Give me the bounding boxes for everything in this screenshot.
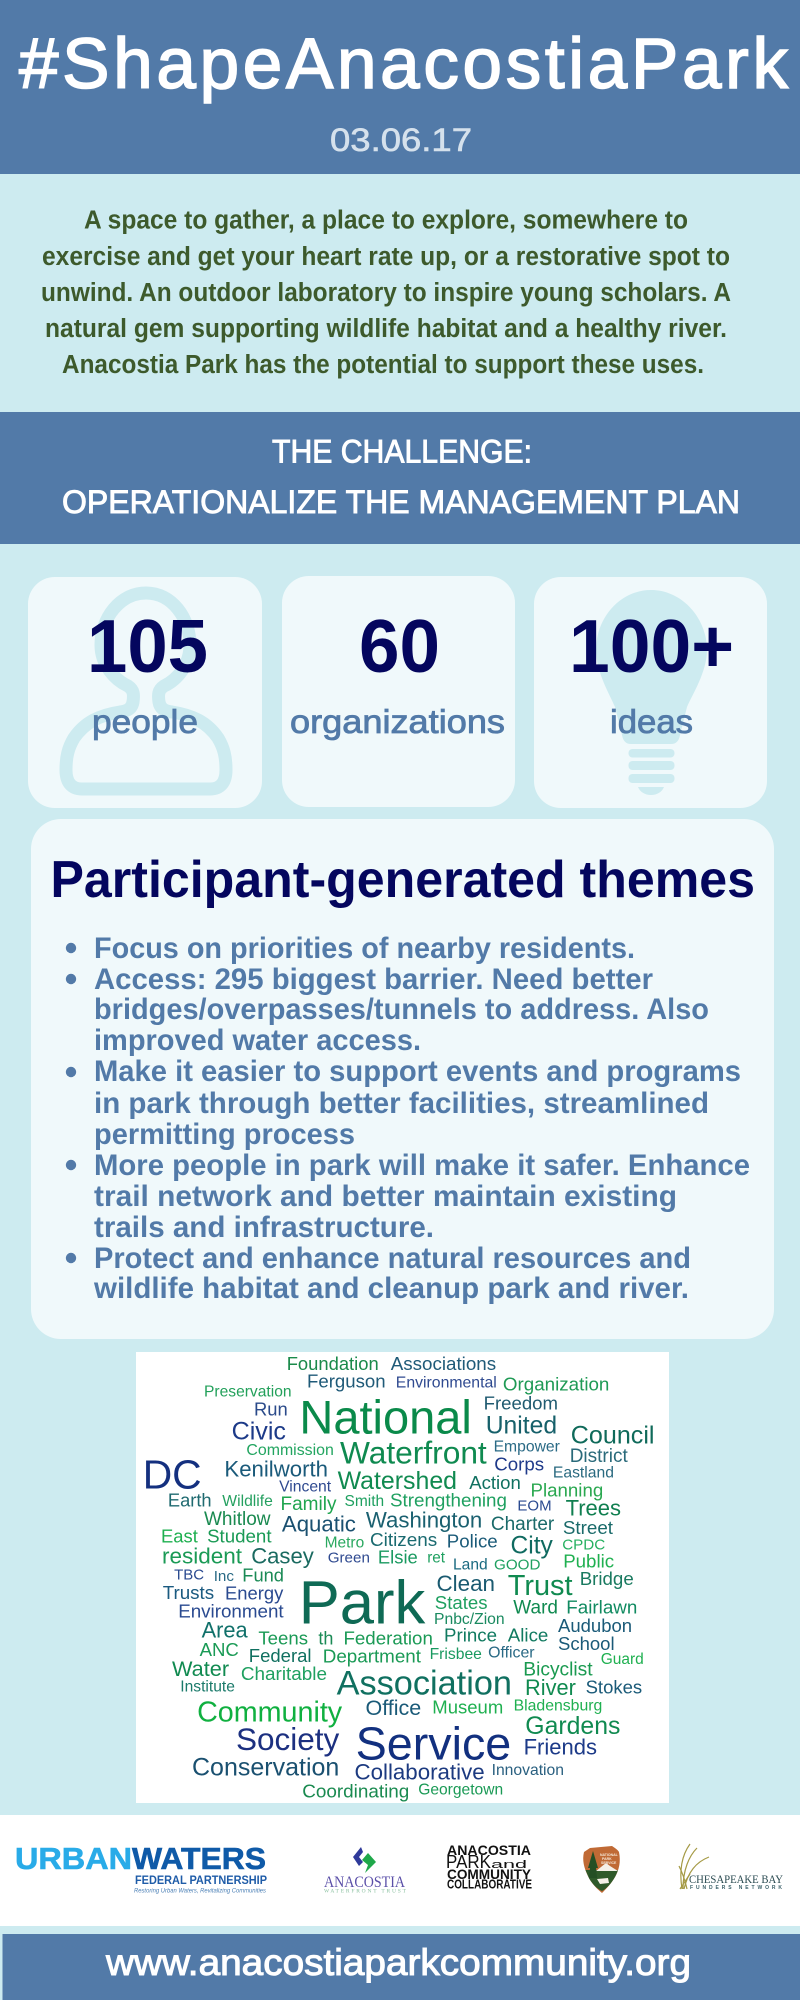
date: 03.06.17 <box>330 122 472 158</box>
header banner <box>0 0 800 174</box>
logo: National Park Service arrowhead <box>583 1846 620 1893</box>
stat card: people <box>28 577 262 808</box>
word cloud: Pnbc/Zion <box>434 1611 505 1628</box>
bullet list text: Focus on priorities of nearby residents. <box>94 932 635 965</box>
word cloud: City <box>510 1532 554 1559</box>
bullet list text: in park through better facilities, streamlined <box>94 1087 709 1120</box>
word cloud: Waterfront <box>340 1434 487 1470</box>
word cloud: Whitlow <box>204 1509 271 1530</box>
challenge banner <box>0 412 800 544</box>
intro text block: Anacostia Park has the potential to support these uses. <box>62 351 704 379</box>
stat number: 60: 60 <box>359 604 440 688</box>
word cloud: resident <box>162 1543 243 1568</box>
word cloud: Smith <box>344 1493 384 1510</box>
logo: Anacostia Park and Community Collaborative: COLLABORATIVE <box>447 1878 532 1892</box>
intro text block: unwind. An outdoor laboratory to inspire young scholars. A <box>41 279 731 307</box>
title: #ShapeAnacostiaPark <box>19 25 788 104</box>
word cloud: Vincent <box>279 1479 332 1496</box>
word cloud: Freedom <box>484 1392 558 1413</box>
word cloud: EOM <box>517 1498 552 1515</box>
word cloud: Run <box>254 1398 288 1419</box>
word cloud: Family <box>280 1494 337 1515</box>
bullet list text <box>93 932 750 1305</box>
bullet list text: bridges/overpasses/tunnels to address. Also <box>94 993 709 1026</box>
logo: National Park Service arrowhead: NATIONAL <box>600 1853 619 1857</box>
intro text block: exercise and get your heart rate up, or a restorative spot to <box>42 243 730 271</box>
intro text block: A space to gather, a place to explore, somewhere to <box>84 206 688 234</box>
stat number: 105: 105 <box>87 604 208 688</box>
word cloud: Society <box>236 1721 340 1757</box>
logo: Anacostia Park and Community Collaborative: PARK <box>446 1852 491 1872</box>
word cloud: Environment <box>178 1600 284 1621</box>
word cloud: Water <box>172 1656 229 1681</box>
word cloud: Commission <box>246 1442 334 1459</box>
word cloud: Organization <box>503 1374 609 1395</box>
word cloud: Wildlife <box>222 1493 273 1510</box>
logo: Anacostia Waterfront Trust: WATERFRONT TRUST <box>324 1888 407 1894</box>
word cloud: Strengthening <box>390 1490 507 1511</box>
word cloud: Alice <box>508 1625 548 1646</box>
word cloud: GOOD <box>494 1556 540 1573</box>
website url: www.anacostiaparkcommunity.org <box>105 1942 691 1983</box>
word cloud: Federation <box>344 1627 433 1648</box>
word cloud: National <box>299 1390 472 1443</box>
word cloud: Area <box>202 1617 249 1642</box>
logo: Anacostia Park and Community Collaborative: and <box>491 1859 527 1871</box>
word cloud: Eastland <box>553 1464 614 1481</box>
word cloud: Institute <box>180 1679 235 1696</box>
word cloud: Street <box>563 1517 614 1538</box>
word cloud: TBC <box>174 1566 204 1583</box>
word cloud: Earth <box>168 1490 212 1511</box>
stat card: ideas <box>534 577 767 808</box>
word cloud: East <box>161 1526 198 1547</box>
word cloud: Bladensburg <box>514 1698 602 1715</box>
panel: participant-generated themes <box>31 819 774 1339</box>
icon: light bulb <box>596 590 707 795</box>
word cloud: Action <box>469 1472 521 1493</box>
word cloud <box>136 1352 669 1803</box>
word cloud: th <box>318 1628 333 1648</box>
word cloud: Charitable <box>241 1664 327 1685</box>
logo: National Park Service arrowhead: SERVICE <box>601 1861 617 1865</box>
word cloud: Student <box>207 1526 272 1547</box>
word cloud: Ferguson <box>307 1370 386 1391</box>
word cloud: Ward <box>513 1597 558 1618</box>
word cloud: Planning <box>530 1480 603 1501</box>
stat card: organizations <box>282 576 515 807</box>
word cloud: Gardens <box>525 1713 620 1740</box>
word cloud: Office <box>366 1696 421 1720</box>
word cloud: Department <box>323 1645 422 1666</box>
logo: Anacostia Waterfront Trust <box>324 1847 407 1894</box>
word cloud: Officer <box>488 1644 535 1661</box>
logo: Chesapeake Bay Funders Network: FUNDERS NETWORK <box>690 1885 782 1891</box>
word cloud: Association <box>337 1664 512 1702</box>
word cloud: Audubon <box>558 1615 632 1636</box>
word cloud: Energy <box>225 1582 284 1603</box>
stat number: 100+: 100+ <box>569 604 734 688</box>
bullet list text: permitting process <box>94 1118 355 1151</box>
word cloud: Environmental <box>396 1374 497 1391</box>
word cloud: ANC <box>200 1639 239 1660</box>
stat label: organizations: organizations <box>290 703 505 740</box>
word cloud: Innovation <box>492 1762 564 1779</box>
word cloud: School <box>558 1633 615 1654</box>
word cloud: Land <box>453 1556 488 1573</box>
word cloud: Prince <box>444 1625 497 1646</box>
intro text block <box>41 206 731 379</box>
logo: Urban Waters <box>15 1841 267 1895</box>
word cloud: ret <box>427 1550 446 1567</box>
word cloud: Georgetown <box>418 1781 503 1798</box>
word cloud: Casey <box>251 1543 314 1568</box>
panel heading: Participant-generated themes <box>50 851 755 909</box>
word cloud: Green <box>328 1550 370 1567</box>
word cloud: Community <box>197 1696 343 1728</box>
word cloud: Trees <box>566 1496 621 1521</box>
word cloud: Coordinating <box>302 1781 409 1802</box>
word cloud: Aquatic <box>282 1512 356 1537</box>
challenge heading <box>62 434 740 520</box>
word cloud: States <box>435 1592 488 1613</box>
logo: Chesapeake Bay Funders Network <box>679 1844 783 1891</box>
word cloud: Museum <box>432 1696 503 1717</box>
challenge heading: THE CHALLENGE: <box>272 434 532 470</box>
word cloud: River <box>525 1675 576 1700</box>
logo: Urban Waters: URBAN <box>15 1841 132 1876</box>
word cloud: District <box>570 1446 628 1467</box>
word cloud: Federal <box>249 1645 312 1666</box>
logo: Anacostia Park and Community Collaborative: COMMUNITY <box>447 1866 532 1882</box>
word cloud: United <box>486 1412 557 1439</box>
word cloud: Clean <box>436 1571 495 1596</box>
word cloud: Bridge <box>580 1568 634 1589</box>
word cloud: Elsie <box>378 1546 418 1567</box>
bullet list text: Protect and enhance natural resources and <box>94 1242 691 1275</box>
word cloud: Preservation <box>204 1384 292 1401</box>
word cloud: Park <box>299 1568 426 1637</box>
word cloud: Inc <box>214 1568 234 1585</box>
icon: person outline <box>66 593 226 789</box>
word cloud: Foundation <box>287 1353 379 1374</box>
word cloud: Corps <box>494 1454 544 1475</box>
word cloud: DC <box>143 1451 202 1497</box>
logo: Anacostia Waterfront Trust: ANACOSTIA <box>324 1874 405 1891</box>
word cloud: Washington <box>366 1508 482 1533</box>
logo: Urban Waters: WATERS <box>132 1841 266 1876</box>
logo: Anacostia Park and Community Collaborative <box>446 1842 532 1892</box>
word cloud: Kenilworth <box>224 1457 328 1482</box>
word cloud: Watershed <box>338 1467 457 1495</box>
bullet list text: wildlife habitat and cleanup park and river. <box>93 1272 689 1305</box>
word cloud: CPDC <box>562 1536 605 1553</box>
word cloud: Teens <box>258 1627 308 1648</box>
challenge heading: OPERATIONALIZE THE MANAGEMENT PLAN <box>62 484 740 520</box>
bullet list text: Make it easier to support events and programs <box>94 1055 741 1088</box>
word cloud: Charter <box>491 1514 555 1535</box>
word cloud: Trusts <box>163 1582 214 1603</box>
word cloud: Bicyclist <box>523 1659 593 1680</box>
word cloud: Council <box>571 1422 654 1450</box>
word cloud: Citizens <box>370 1530 437 1551</box>
word cloud: Associations <box>391 1353 496 1374</box>
logo: Urban Waters: FEDERAL PARTNERSHIP <box>135 1875 267 1887</box>
logo: Chesapeake Bay Funders Network: CHESAPEAKE BAY <box>689 1872 783 1886</box>
logo band <box>0 1815 800 1926</box>
word cloud: Police <box>447 1530 498 1551</box>
intro text block: natural gem supporting wildlife habitat and a healthy river. <box>45 315 727 343</box>
bullet list text: improved water access. <box>94 1024 421 1057</box>
bullet list text: trails and infrastructure. <box>94 1211 434 1244</box>
word cloud: Friends <box>524 1734 597 1759</box>
word cloud: Fund <box>242 1565 284 1586</box>
logo: National Park Service arrowhead: PARK <box>602 1857 612 1861</box>
word cloud: Public <box>563 1551 614 1572</box>
word cloud: Trust <box>508 1570 573 1602</box>
word cloud: Conservation <box>192 1754 339 1782</box>
word cloud: Frisbee <box>430 1646 482 1663</box>
word cloud: Metro <box>325 1534 364 1551</box>
bullet list text: Access: 295 biggest barrier. Need better <box>94 963 654 996</box>
logo: Anacostia Park and Community Collaborative: ANACOSTIA <box>447 1842 531 1858</box>
stat label: people: people <box>92 703 198 740</box>
word cloud: Empower <box>494 1439 560 1456</box>
word cloud: Civic <box>232 1417 286 1445</box>
bullet list text: trail network and better maintain existing <box>94 1180 677 1213</box>
word cloud: Guard <box>601 1651 644 1668</box>
word cloud: Fairlawn <box>566 1596 637 1617</box>
stat label: ideas: ideas <box>610 703 693 740</box>
word cloud: Stokes <box>586 1676 642 1697</box>
logo: Urban Waters: Restoring Urban Waters, Revitalizing Communities <box>134 1888 267 1895</box>
footer banner <box>2 1934 800 2000</box>
bullet list text: More people in park will make it safer. Enhance <box>94 1149 750 1182</box>
word cloud: Collaborative <box>354 1759 485 1784</box>
word cloud: Service <box>356 1717 511 1769</box>
bullet markers <box>66 943 76 1263</box>
